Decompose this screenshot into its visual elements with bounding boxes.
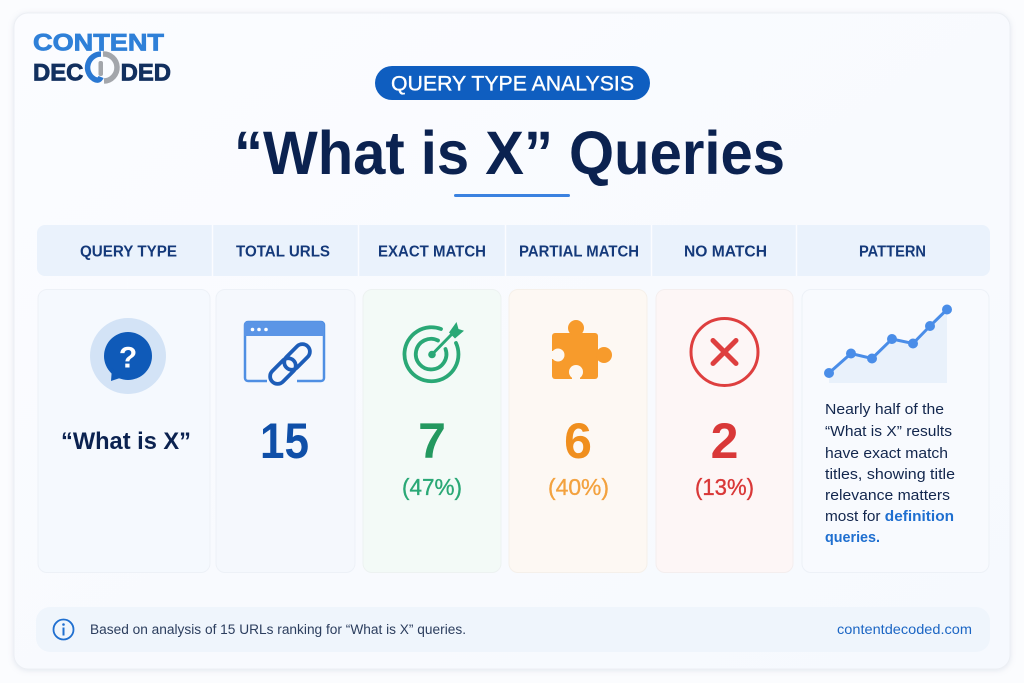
pattern description: have exact match [825,445,948,462]
icon: target [404,322,464,381]
footer bar [36,607,990,652]
panel: total urls [216,290,355,572]
query label: “What is X” [61,428,191,455]
badge: query type analysis: QUERY TYPE ANALYSIS [391,72,634,96]
footer note: Based on analysis of 15 URLs ranking for “What is X” queries. [90,622,466,637]
pattern description: most for definition [825,508,954,525]
icon: info [54,620,74,640]
pattern description: “What is X” results [825,423,952,440]
total value: 15 [260,413,309,469]
partial value: 6 [564,413,592,469]
icon: question bubble [90,318,166,394]
icon: x circle [691,318,758,386]
logo [33,30,171,86]
header: pattern: PATTERN [859,244,926,260]
panel: exact match [363,290,501,572]
panel: pattern [802,290,989,572]
chart: rising line [824,304,952,383]
header: no match: NO MATCH [684,244,767,260]
partial percent: (40%) [548,474,609,500]
title: “What is X” Queries [234,119,785,187]
footer url: contentdecoded.com [837,621,972,637]
exact value: 7 [418,413,446,469]
pattern description: Nearly half of the [825,401,944,418]
icon: browser link [244,322,324,387]
pattern description: queries. [825,529,880,546]
table header row [37,225,990,276]
icon: puzzle piece [551,320,612,380]
logo: CONTENT [33,30,164,56]
no match value: 2 [711,413,738,469]
panel: query type [38,290,210,572]
exact percent: (47%) [402,474,462,500]
header: total urls: TOTAL URLS [236,244,330,260]
pattern description: relevance matters [825,487,950,504]
pattern description: titles, showing title [825,466,955,483]
icon: question bubble: ? [119,342,137,374]
title underline [454,194,570,197]
logo: DECOODED [33,60,171,86]
badge: query type analysis [375,66,650,100]
panel: no match [656,290,793,572]
no match percent: (13%) [695,474,754,500]
panel: partial match [509,290,647,572]
pattern description [825,401,955,546]
header: query type: QUERY TYPE [80,244,177,260]
header: partial match: PARTIAL MATCH [519,244,639,260]
header: exact match: EXACT MATCH [378,244,486,260]
